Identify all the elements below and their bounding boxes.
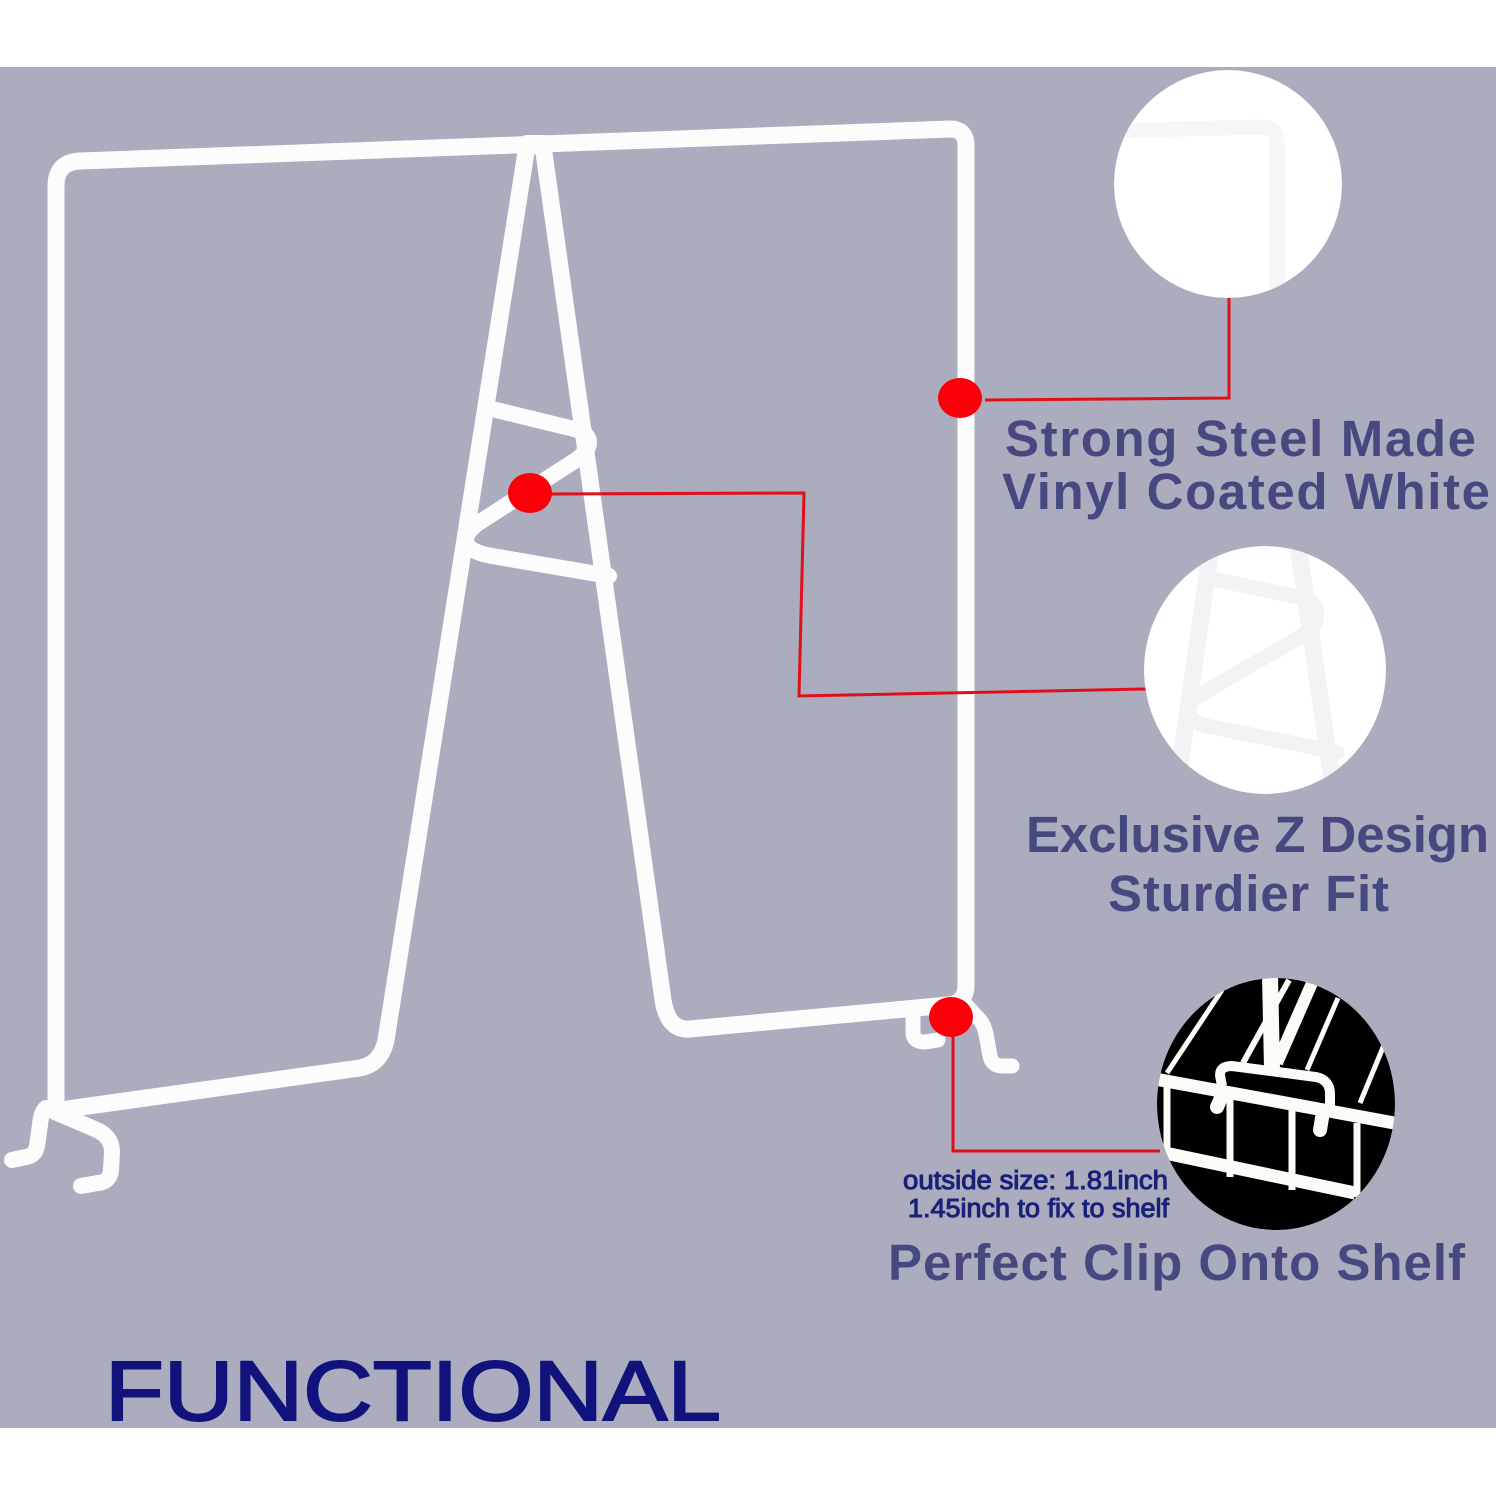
- red marker: Z brace: [508, 473, 552, 513]
- title: FUNCTIONAL: FUNCTIONAL: [105, 1344, 721, 1438]
- label: Z design: Exclusive Z Design: [1026, 806, 1489, 863]
- callout line: steel: [985, 296, 1229, 400]
- label: Z design: [1026, 806, 1489, 922]
- Z brace: [466, 408, 609, 576]
- label: Z design: Sturdier Fit: [1108, 865, 1389, 922]
- detail circle: Z design: [1144, 545, 1386, 794]
- left foot hooks: [12, 1108, 46, 1160]
- callout line: clip: [953, 1035, 1160, 1151]
- callout line: Z design: [550, 493, 1146, 696]
- detail circle: clip on shelf: [1155, 975, 1400, 1230]
- right foot hooks: [913, 1016, 938, 1042]
- label: steel: Vinyl Coated White: [1002, 463, 1490, 520]
- label: size note: outside size: 1.81inch: [903, 1167, 1168, 1195]
- frame, rails and legs: [56, 129, 966, 1112]
- apex joint: [527, 135, 543, 151]
- label: clip: Perfect Clip Onto Shelf: [888, 1234, 1466, 1291]
- detail circle: corner: [1105, 70, 1342, 300]
- red marker: frame: [938, 378, 982, 418]
- label: size note: 1.45inch to fix to shelf: [908, 1195, 1170, 1223]
- label: steel: [1002, 410, 1490, 520]
- wire shelf divider: [12, 129, 1012, 1186]
- red marker: foot: [929, 997, 973, 1037]
- label: size note: [903, 1167, 1170, 1223]
- label: steel: Strong Steel Made: [1005, 410, 1476, 467]
